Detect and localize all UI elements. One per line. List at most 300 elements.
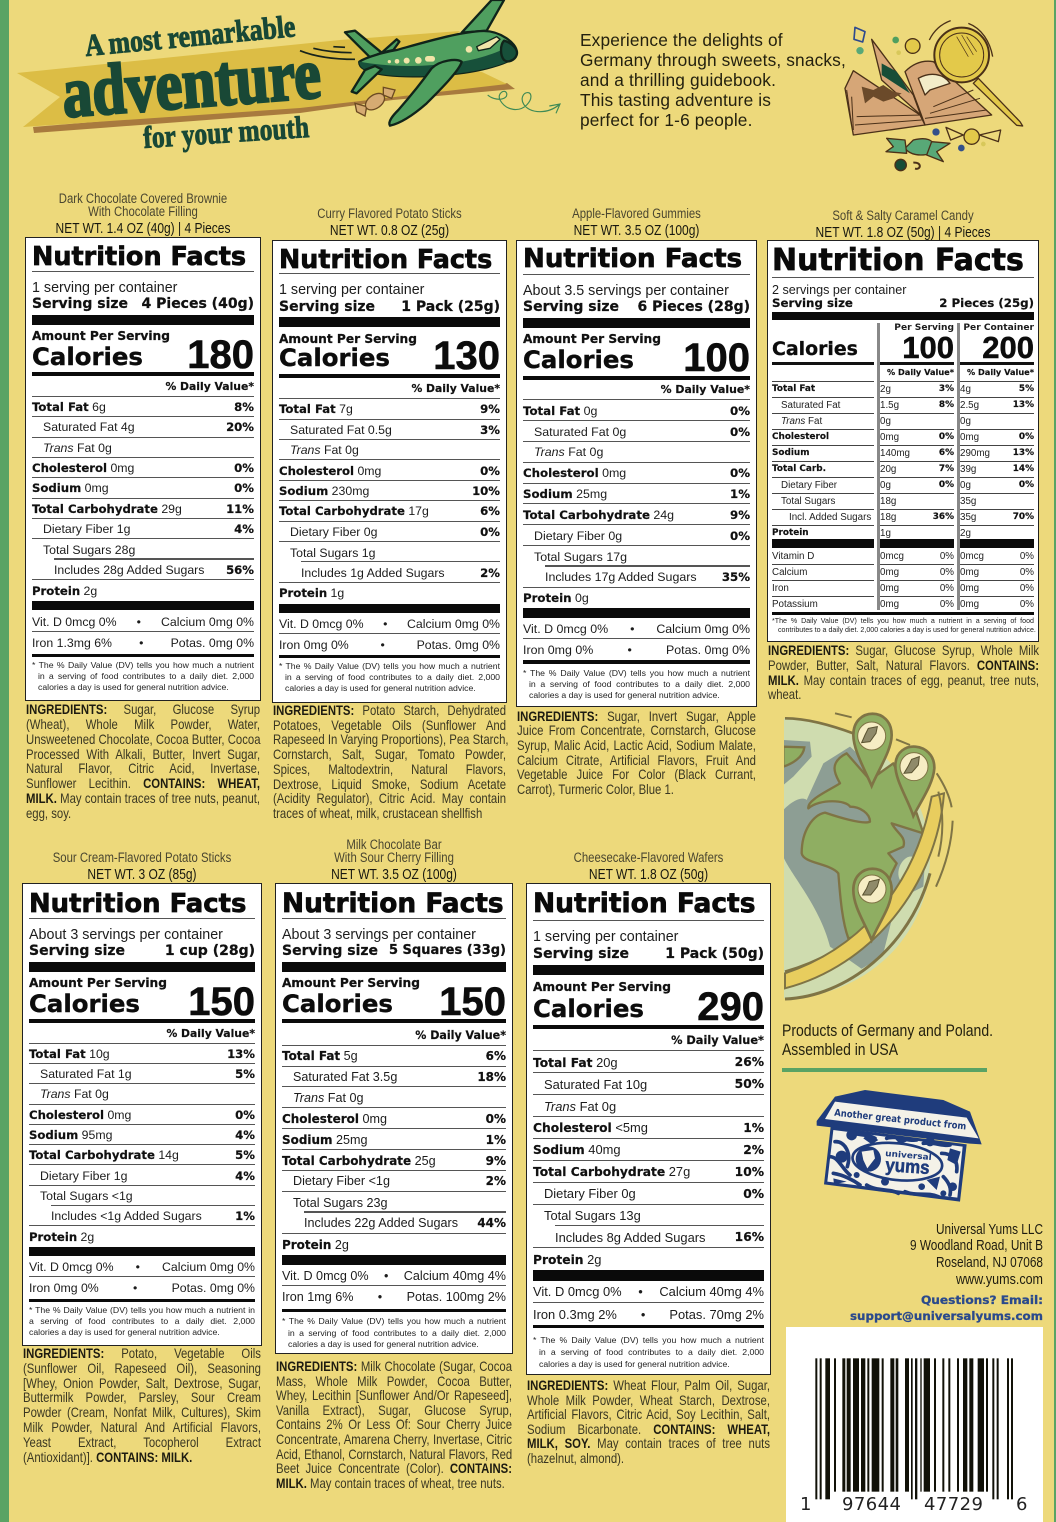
footnote <box>32 660 254 692</box>
vitamins: • <box>383 617 387 631</box>
ingredients: cheesecake wafers: Sodium Bicarbonate. CONTAINS: WHEAT, <box>527 1421 770 1437</box>
vitamins: Vit. D 0mcg 0% <box>29 1260 114 1274</box>
ingredients: curry potato sticks <box>273 702 509 821</box>
caption: milk chocolate bar: Milk Chocolate Bar <box>346 837 442 853</box>
nutrient rows: Cholesterol 0mg <box>29 1108 131 1122</box>
calories per container: Per Container <box>963 323 1034 333</box>
nutrient rows: 0% <box>730 425 750 439</box>
nutrient rows: Total Carbohydrate 17g <box>279 504 429 518</box>
vitamins <box>29 1260 255 1295</box>
text: support email: Questions? Email: <box>921 1293 1043 1307</box>
text: company address: www.yums.com <box>955 1272 1043 1288</box>
nutrient rows: Cholesterol 0mg <box>523 466 626 480</box>
nutrient table: 7% <box>939 464 954 474</box>
nutrient rows: Total Fat 0g <box>523 404 597 418</box>
footnote: calories a day is used for general nutrition advice. <box>29 1327 220 1337</box>
vitamins <box>282 1269 506 1304</box>
calories per serving: Per Serving <box>894 323 954 333</box>
calories label <box>772 338 874 365</box>
nutrient rows: 1% <box>730 487 750 501</box>
text: support email: support@universalyums.com <box>850 1309 1043 1323</box>
serving info: Serving size <box>282 943 378 959</box>
calories per container: 200 <box>982 330 1034 365</box>
caption: apple gummies: Apple-Flavored Gummies <box>572 206 701 222</box>
nutrient table: Dietary Fiber <box>781 480 837 491</box>
icon: open book with magnifying glass and candies <box>845 21 1023 171</box>
nutrient table: 2g <box>880 384 891 395</box>
serving info: About 3 servings per container <box>282 927 476 943</box>
ingredients: milk chocolate bar: Acid, Ethanol, Cornstarch, Natural Flavors, Red <box>276 1446 512 1462</box>
vitamins: Iron 1.3mg 6% <box>32 636 112 650</box>
vitamins: • <box>378 1290 382 1304</box>
calories: Amount Per Serving <box>533 980 671 994</box>
nutrient rows: Includes 28g Added Sugars <box>54 563 204 577</box>
heading: a most remarkable adventure for your mouth <box>59 8 323 155</box>
text: support email <box>850 1293 1043 1323</box>
ingredients: cheesecake wafers: INGREDIENTS: Wheat Flour, Palm Oil, Sugar, <box>527 1377 770 1393</box>
icon: tan candy <box>355 87 395 116</box>
calories: Calories <box>523 345 634 374</box>
intro text block: This tasting adventure is <box>580 90 771 110</box>
panel: sour cream potato sticks nutrition facts <box>23 884 261 1345</box>
nutrient rows: Total Fat 10g <box>29 1047 110 1061</box>
serving info: 1 serving per container <box>279 282 424 298</box>
vitamin table: 0mcg <box>880 551 904 562</box>
calories: Calories <box>32 342 143 371</box>
ingredients: brownie: egg, soy. <box>26 805 71 821</box>
vitamin table: 0mcg <box>960 551 984 562</box>
nutrient table: Total Sugars <box>781 496 835 507</box>
nutrient rows: 20% <box>226 420 254 434</box>
nutrient table: 2g <box>960 528 971 539</box>
nutrient rows <box>32 380 254 598</box>
footnote: calories a day is used for general nutrition advice. <box>38 682 229 692</box>
ingredients: curry potato sticks: Rapeseed In Varying Proportions), Pea Starch, <box>273 731 509 747</box>
ingredients: cheesecake wafers: MILK, SOY. May contain traces of tree nuts <box>527 1435 770 1451</box>
vitamins <box>533 1281 764 1325</box>
logo: universal yums box <box>817 1090 982 1202</box>
barcode <box>786 1327 1043 1522</box>
nutrient rows: 1% <box>235 1209 255 1223</box>
nutrient rows: Includes 8g Added Sugars <box>555 1230 706 1245</box>
calories: Calories <box>29 989 140 1018</box>
logo: universal yums box: universal <box>885 1148 932 1162</box>
nutrient rows: 5% <box>235 1148 255 1162</box>
nutrient table: 3% <box>939 384 954 394</box>
nutrient rows: 6% <box>486 1049 506 1063</box>
footnote: * The % Daily Value (DV) tells you how much a nutrient <box>523 668 750 678</box>
logo: universal yums box: yums <box>885 1154 930 1178</box>
calories <box>28 976 255 1024</box>
footnote: in a serving of food contributes to a daily diet. 2,000 <box>539 1347 764 1357</box>
nutrient rows: Cholesterol 0mg <box>279 464 381 478</box>
heading: a most remarkable adventure for your mouth: adventure <box>59 33 323 133</box>
vitamins: Calcium 0mg 0% <box>161 615 254 629</box>
nutrient rows: 11% <box>226 502 254 516</box>
text: company address <box>910 1222 1043 1288</box>
vitamins: Calcium 0mg 0% <box>162 1260 255 1274</box>
vitamins: Vit. D 0mcg 0% <box>533 1284 622 1299</box>
nutrient table: 35g <box>960 496 976 507</box>
ingredients: milk chocolate bar: Concentrate, Amarena Cherry, Invertase, Citric <box>276 1431 512 1447</box>
nutrient rows <box>28 1027 255 1244</box>
calories: 150 <box>188 980 255 1024</box>
vitamins: Potas. 0mg 0% <box>172 1281 255 1295</box>
serving info <box>32 280 254 312</box>
calories <box>282 976 506 1024</box>
ingredients: apple gummies: Juice From Concentrate, Cornstarch, Glucose <box>517 722 756 738</box>
ingredients: brownie: MILK. May contain traces of tree nuts, peanut, <box>26 790 260 806</box>
vitamins: Iron 0mg 0% <box>29 1281 99 1295</box>
nutrient rows: Saturated Fat 0.5g <box>290 423 392 437</box>
nutrient table: % Daily Value* <box>887 367 954 377</box>
nutrient table: Incl. Added Sugars <box>789 512 871 523</box>
nutrient table: 36% <box>933 512 954 522</box>
intro text block: Experience the delights of <box>580 30 783 50</box>
vitamin table: 0% <box>940 583 954 594</box>
nutrient rows: 26% <box>735 1055 764 1069</box>
nutrient table: 18g <box>880 496 896 507</box>
ingredients: apple gummies: Vegetable Juice For Color (Black Currant, <box>517 766 756 782</box>
vitamins <box>279 617 500 652</box>
nutrient rows: Cholesterol 0mg <box>32 461 134 475</box>
nutrient rows: Sodium 25mg <box>282 1133 368 1147</box>
nutrient rows: 2% <box>480 566 500 580</box>
intro text block: perfect for 1-6 people. <box>580 110 753 130</box>
vitamins <box>32 615 254 650</box>
nutrient rows: % Daily Value* <box>165 380 254 393</box>
nutrient rows: Sodium 0mg <box>32 481 109 495</box>
nutrient rows: Sodium 40mg <box>533 1142 621 1157</box>
nutrient rows: 10% <box>472 484 500 498</box>
vitamins: • <box>137 615 141 629</box>
caption: apple gummies: NET WT. 3.5 OZ (100g) <box>574 222 699 239</box>
nutrient rows: Includes 1g Added Sugars <box>301 566 445 580</box>
nutrient rows: Trans Fat 0g <box>544 1098 616 1114</box>
intro text block <box>580 30 846 130</box>
serving info: 5 Squares (33g) <box>389 943 506 958</box>
ingredients: curry potato sticks: Potatoes, Vegetable Oils (Sunflower And <box>273 717 506 733</box>
footnote: in a serving of food contributes to a daily diet. 2,000 <box>285 672 500 682</box>
nutrient rows: Total Fat 5g <box>282 1049 358 1063</box>
ingredients: sour cream potato sticks: INGREDIENTS: Potato, Vegetable Oils <box>23 1345 261 1361</box>
panel: cheesecake wafers nutrition facts <box>527 884 770 1374</box>
vitamins: • <box>139 636 143 650</box>
ingredients: apple gummies <box>517 708 756 797</box>
nutrient rows: Total Fat 6g <box>32 400 106 414</box>
ingredients: milk chocolate bar: MILK. May contain traces of wheat, tree nuts. <box>276 1475 505 1491</box>
vitamin table <box>772 551 1034 610</box>
vitamin table: 0mg <box>960 567 979 578</box>
nutrient rows: 13% <box>227 1047 255 1061</box>
vitamins: Vit. D 0mcg 0% <box>523 622 608 636</box>
vitamins: Vit. D 0mcg 0% <box>282 1269 369 1283</box>
nutrient rows: % Daily Value* <box>671 1033 764 1047</box>
nutrient table: 14% <box>1013 464 1034 474</box>
nutrient rows: 0% <box>235 1108 255 1122</box>
nutrient rows: Total Sugars 1g <box>290 546 375 560</box>
ingredients: caramel candy <box>768 642 1039 702</box>
nutrient rows: 9% <box>480 402 500 416</box>
ingredients: sour cream potato sticks: Yeast Extract, Tocopherol Extract <box>23 1434 261 1450</box>
ingredients: cheesecake wafers: (hazelnut, almond). <box>527 1450 624 1466</box>
caption: caramel candy: NET WT. 1.8 OZ (50g) | 4 Pieces <box>816 224 990 241</box>
nutrient table: 1.5g <box>880 400 899 411</box>
calories: 100 <box>683 336 750 380</box>
calories: Calories <box>533 994 644 1023</box>
vitamins: Potas. 0mg 0% <box>666 643 750 657</box>
nutrient rows: Saturated Fat 3.5g <box>293 1070 397 1084</box>
serving info: 1 cup (28g) <box>165 943 255 959</box>
ingredients: milk chocolate bar: Mass, Whole Milk Powder, Cocoa Butter, <box>276 1373 512 1389</box>
calories: 180 <box>187 333 254 377</box>
panel: dark chocolate brownie nutrition facts <box>26 238 260 700</box>
nutrient table: 5% <box>1019 384 1034 394</box>
ingredients: milk chocolate bar: Beet Juice Concentrate (Color). CONTAINS: <box>276 1460 512 1476</box>
nutrient table: 0% <box>1019 432 1034 442</box>
heading: Nutrition Facts <box>282 888 504 919</box>
ingredients: brownie: Processed With Alkali, Butter, Invert Sugar, <box>26 746 260 762</box>
nutrient table: 0g <box>960 416 971 427</box>
nutrient table: 0% <box>1019 480 1034 490</box>
vitamin table: Vitamin D <box>772 551 814 562</box>
calories per serving <box>880 323 954 365</box>
heading: Nutrition Facts <box>523 244 742 274</box>
footnote: * The % Daily Value (DV) tells you how much a nutrient <box>32 660 254 670</box>
nutrient rows: Total Fat 20g <box>533 1055 618 1070</box>
nutrient rows <box>533 1029 764 1270</box>
ingredients: brownie <box>26 701 261 821</box>
nutrient rows: Dietary Fiber 1g <box>43 522 130 536</box>
nutrient table: Cholesterol <box>772 432 829 442</box>
vitamins: • <box>641 1307 645 1322</box>
ingredients: brownie: Unsweetened Chocolate, Cocoa Butter, Cocoa <box>26 731 261 747</box>
nutrient rows: % Daily Value* <box>415 1029 506 1042</box>
ingredients: curry potato sticks: Dextrose, Liquid Smoke, Sodium Acetate <box>273 776 506 792</box>
ingredients: brownie: (Wheat), Whole Milk Powder, Water, <box>26 716 260 732</box>
serving info: 1 Pack (50g) <box>665 946 764 962</box>
ingredients: caramel candy: INGREDIENTS: Sugar, Glucose Syrup, Whole Milk <box>768 642 1039 658</box>
ingredients: brownie: Natural Flavor, Citric Acid, Invertase, <box>26 760 260 776</box>
caption: dark chocolate brownie: Dark Chocolate Covered Brownie <box>59 191 227 207</box>
nutrient rows <box>278 382 500 600</box>
nutrient rows: 35% <box>722 570 750 584</box>
calories: Amount Per Serving <box>282 976 420 990</box>
vitamin table: Potassium <box>772 599 818 610</box>
vitamin table: 0% <box>1020 567 1034 578</box>
serving info: About 3.5 servings per container <box>523 283 729 299</box>
footnote: in a serving of food contributes to a daily diet. 2,000 <box>38 671 254 681</box>
serving info: Serving size <box>29 943 125 959</box>
nutrient rows: 6% <box>480 504 500 518</box>
nutrient table: 4g <box>960 384 971 395</box>
vitamins: Calcium 40mg 4% <box>659 1284 764 1299</box>
nutrient rows: Total Sugars 13g <box>544 1208 641 1223</box>
caption: dark chocolate brownie: NET WT. 1.4 OZ (40g) | 4 Pieces <box>56 220 230 237</box>
nutrient rows: 0% <box>730 529 750 543</box>
calories: Amount Per Serving <box>279 332 417 346</box>
nutrient table: Total Fat <box>772 384 815 394</box>
nutrient rows: Dietary Fiber 0g <box>544 1186 636 1201</box>
ingredients: caramel candy: MILK. May contain traces of egg, peanut, tree nuts, <box>768 672 1039 688</box>
nutrient rows: 2% <box>743 1143 764 1157</box>
nutrient rows: Total Sugars 28g <box>43 543 135 557</box>
ingredients: sour cream potato sticks: [Whey, Onion Powder, Salt, Dextrose, Sugar, <box>23 1375 261 1391</box>
nutrient rows: Trans Fat 0g <box>40 1087 109 1101</box>
barcode: 47729 <box>924 1494 983 1515</box>
nutrient rows: Total Carbohydrate 14g <box>29 1148 179 1162</box>
serving info: 2 servings per container <box>772 283 906 297</box>
heading: a most remarkable adventure for your mouth: A most remarkable <box>83 8 297 63</box>
serving info: 1 Pack (25g) <box>401 298 500 314</box>
vitamins: Calcium 0mg 0% <box>656 622 750 636</box>
nutrient table: 35g <box>960 512 976 523</box>
calories per container <box>960 323 1034 365</box>
ingredients: apple gummies: Calcium Citrate, Artificial Flavors, Fruit And <box>517 752 756 768</box>
nutrient rows: 18% <box>477 1070 506 1084</box>
vitamins: • <box>133 1281 137 1295</box>
nutrient rows: Sodium 95mg <box>29 1128 112 1142</box>
nutrient table: 13% <box>1013 448 1034 458</box>
nutrient rows <box>282 1029 506 1252</box>
nutrient table: Protein <box>772 528 809 538</box>
nutrient table: Sodium <box>772 448 809 458</box>
vitamins: Potas. 70mg 2% <box>669 1307 764 1322</box>
barcode: 6 <box>1016 1494 1027 1515</box>
calories <box>522 332 750 380</box>
footnote: *The % Daily Value (DV) tells you how much a nutrient in a serving of food <box>772 617 1034 625</box>
caption: sour cream potato sticks: Sour Cream-Flavored Potato Sticks <box>53 850 231 866</box>
serving info <box>533 928 764 962</box>
intro text block: Germany through sweets, snacks, <box>580 50 846 70</box>
vitamin table: 0mg <box>880 583 899 594</box>
serving info <box>523 283 750 315</box>
ingredients: milk chocolate bar <box>276 1359 512 1490</box>
vitamins: Vit. D 0mcg 0% <box>32 615 117 629</box>
caption: curry potato sticks <box>317 206 462 239</box>
nutrient rows <box>522 383 750 605</box>
ingredients: sour cream potato sticks: Buttermilk Powder, Parsley, Sour Cream <box>23 1389 261 1405</box>
nutrient rows: 56% <box>226 563 254 577</box>
nutrient rows: Total Carbohydrate 27g <box>533 1164 690 1179</box>
serving info <box>29 927 255 959</box>
ingredients: sour cream potato sticks: Powder (Cream, Nonfat Milk, Cultures), Skim <box>23 1404 261 1420</box>
ingredients: apple gummies: Syrup, Malic Acid, Lactic Acid, Sodium Malate, <box>517 737 756 753</box>
footnote: * The % Daily Value (DV) tells you how much a nutrient <box>282 1316 506 1326</box>
nutrient rows: Includes 22g Added Sugars <box>304 1216 458 1230</box>
nutrient table: Total Carb. <box>772 464 826 474</box>
serving info: Serving size <box>523 299 619 315</box>
panel: curry potato sticks nutrition facts <box>273 241 506 702</box>
caption: cheesecake wafers: NET WT. 1.8 OZ (50g) <box>589 866 708 883</box>
nutrient rows: Total Fat 7g <box>279 402 353 416</box>
vitamins: Iron 0mg 0% <box>279 638 349 652</box>
nutrient rows: 1% <box>743 1121 764 1135</box>
nutrient table: 0g <box>880 480 891 491</box>
nutrient table: 0g <box>960 480 971 491</box>
vitamin table: 0% <box>940 599 954 610</box>
calories: 130 <box>433 334 500 378</box>
ingredients: sour cream potato sticks: (Sunflower Oil, Rapeseed Oil), Seasoning <box>23 1360 261 1376</box>
calories: Amount Per Serving <box>32 329 170 343</box>
nutrient rows: 4% <box>235 1169 255 1183</box>
nutrient rows: 8% <box>234 400 254 414</box>
footnote: calories a day is used for general nutrition advice. <box>529 690 720 700</box>
calories: Calories <box>279 343 390 372</box>
caption: curry potato sticks: NET WT. 0.8 OZ (25g) <box>330 222 449 239</box>
serving info: Serving size <box>772 296 853 310</box>
ingredients: brownie: Sunflower Lecithin. CONTAINS: WHEAT, <box>26 775 260 791</box>
calories <box>533 979 764 1022</box>
nutrient rows: Saturated Fat 1g <box>40 1067 132 1081</box>
text: origin statement <box>782 1021 993 1059</box>
vitamin table: 0% <box>1020 583 1034 594</box>
nutrient rows: Total Sugars 17g <box>534 550 627 564</box>
vitamins: Calcium 0mg 0% <box>407 617 500 631</box>
nutrient rows: 0% <box>234 461 254 475</box>
ingredients: cheesecake wafers: Artificial Flavors, Citric Acid, Soy Lecithin, Salt, <box>527 1406 770 1422</box>
caption: sour cream potato sticks <box>53 850 231 883</box>
nutrient rows: Includes <1g Added Sugars <box>51 1209 202 1223</box>
icon: green airplane <box>345 0 517 126</box>
ingredients: caramel candy: Powder, Butter, Salt, Natural Flavors. CONTAINS: <box>768 657 1039 673</box>
vitamins: • <box>630 622 634 636</box>
ingredients: curry potato sticks: Spices, Maltodextrin, Natural Flavors, <box>273 761 506 777</box>
calories: Amount Per Serving <box>523 332 661 346</box>
vitamin table: 0mg <box>960 599 979 610</box>
nutrient rows: Protein 2g <box>29 1230 94 1244</box>
footnote <box>29 1305 255 1337</box>
nutrient rows: Trans Fat 0g <box>534 445 603 459</box>
ingredients: milk chocolate bar: INGREDIENTS: Milk Chocolate (Sugar, Cocoa <box>276 1358 512 1374</box>
nutrient rows: Protein 0g <box>523 591 589 605</box>
panel: caramel candy dual-column nutrition facts <box>768 241 1038 641</box>
nutrient rows: 1% <box>486 1133 506 1147</box>
nutrient rows: Protein 1g <box>279 586 344 600</box>
caption: cheesecake wafers <box>551 851 746 882</box>
icon: globe with map pins <box>784 712 954 1000</box>
footnote: in a serving of food contributes to a daily diet. 2,000 <box>529 679 750 689</box>
nutrient rows: 0% <box>486 1112 506 1126</box>
nutrient table: % Daily Value* <box>967 367 1034 377</box>
left green edge strip <box>0 0 9 1522</box>
text: origin statement: Assembled in USA <box>782 1040 899 1059</box>
nutrient rows: 0% <box>234 481 254 495</box>
ingredients: milk chocolate bar: Vanilla Extract), Sugar, Glucose Syrup, <box>276 1402 512 1418</box>
nutrient rows: Protein 2g <box>282 1238 349 1252</box>
nutrient rows: 0% <box>743 1187 764 1201</box>
footnote: calories a day is used for general nutrition advice. <box>539 1359 730 1369</box>
vitamins: Iron 0.3mg 2% <box>533 1307 617 1322</box>
footnote: * The % Daily Value (DV) tells you how much a nutrient <box>279 661 500 671</box>
footnote: * The % Daily Value (DV) tells you how much a nutrient <box>533 1335 764 1345</box>
caption: milk chocolate bar <box>331 837 457 883</box>
footnote <box>279 661 500 693</box>
nutrient rows: Dietary Fiber <1g <box>293 1174 390 1188</box>
text: origin statement: Products of Germany and Poland. <box>782 1021 993 1040</box>
ingredients: curry potato sticks: traces of wheat, milk, crustacean shellfish <box>273 805 482 821</box>
nutrient table: 8% <box>939 400 954 410</box>
nutrient rows: Trans Fat 0g <box>293 1091 363 1105</box>
nutrient rows: 0% <box>480 525 500 539</box>
panel: apple gummies nutrition facts <box>517 241 756 706</box>
ingredients: brownie: INGREDIENTS: Sugar, Glucose Syrup <box>26 701 260 717</box>
footnote <box>772 617 1036 634</box>
vitamins: • <box>638 1284 643 1299</box>
nutrient rows: Dietary Fiber 1g <box>40 1169 127 1183</box>
caption: milk chocolate bar: With Sour Cherry Filling <box>334 850 454 866</box>
ingredients: curry potato sticks: INGREDIENTS: Potato Starch, Dehydrated <box>273 702 506 718</box>
